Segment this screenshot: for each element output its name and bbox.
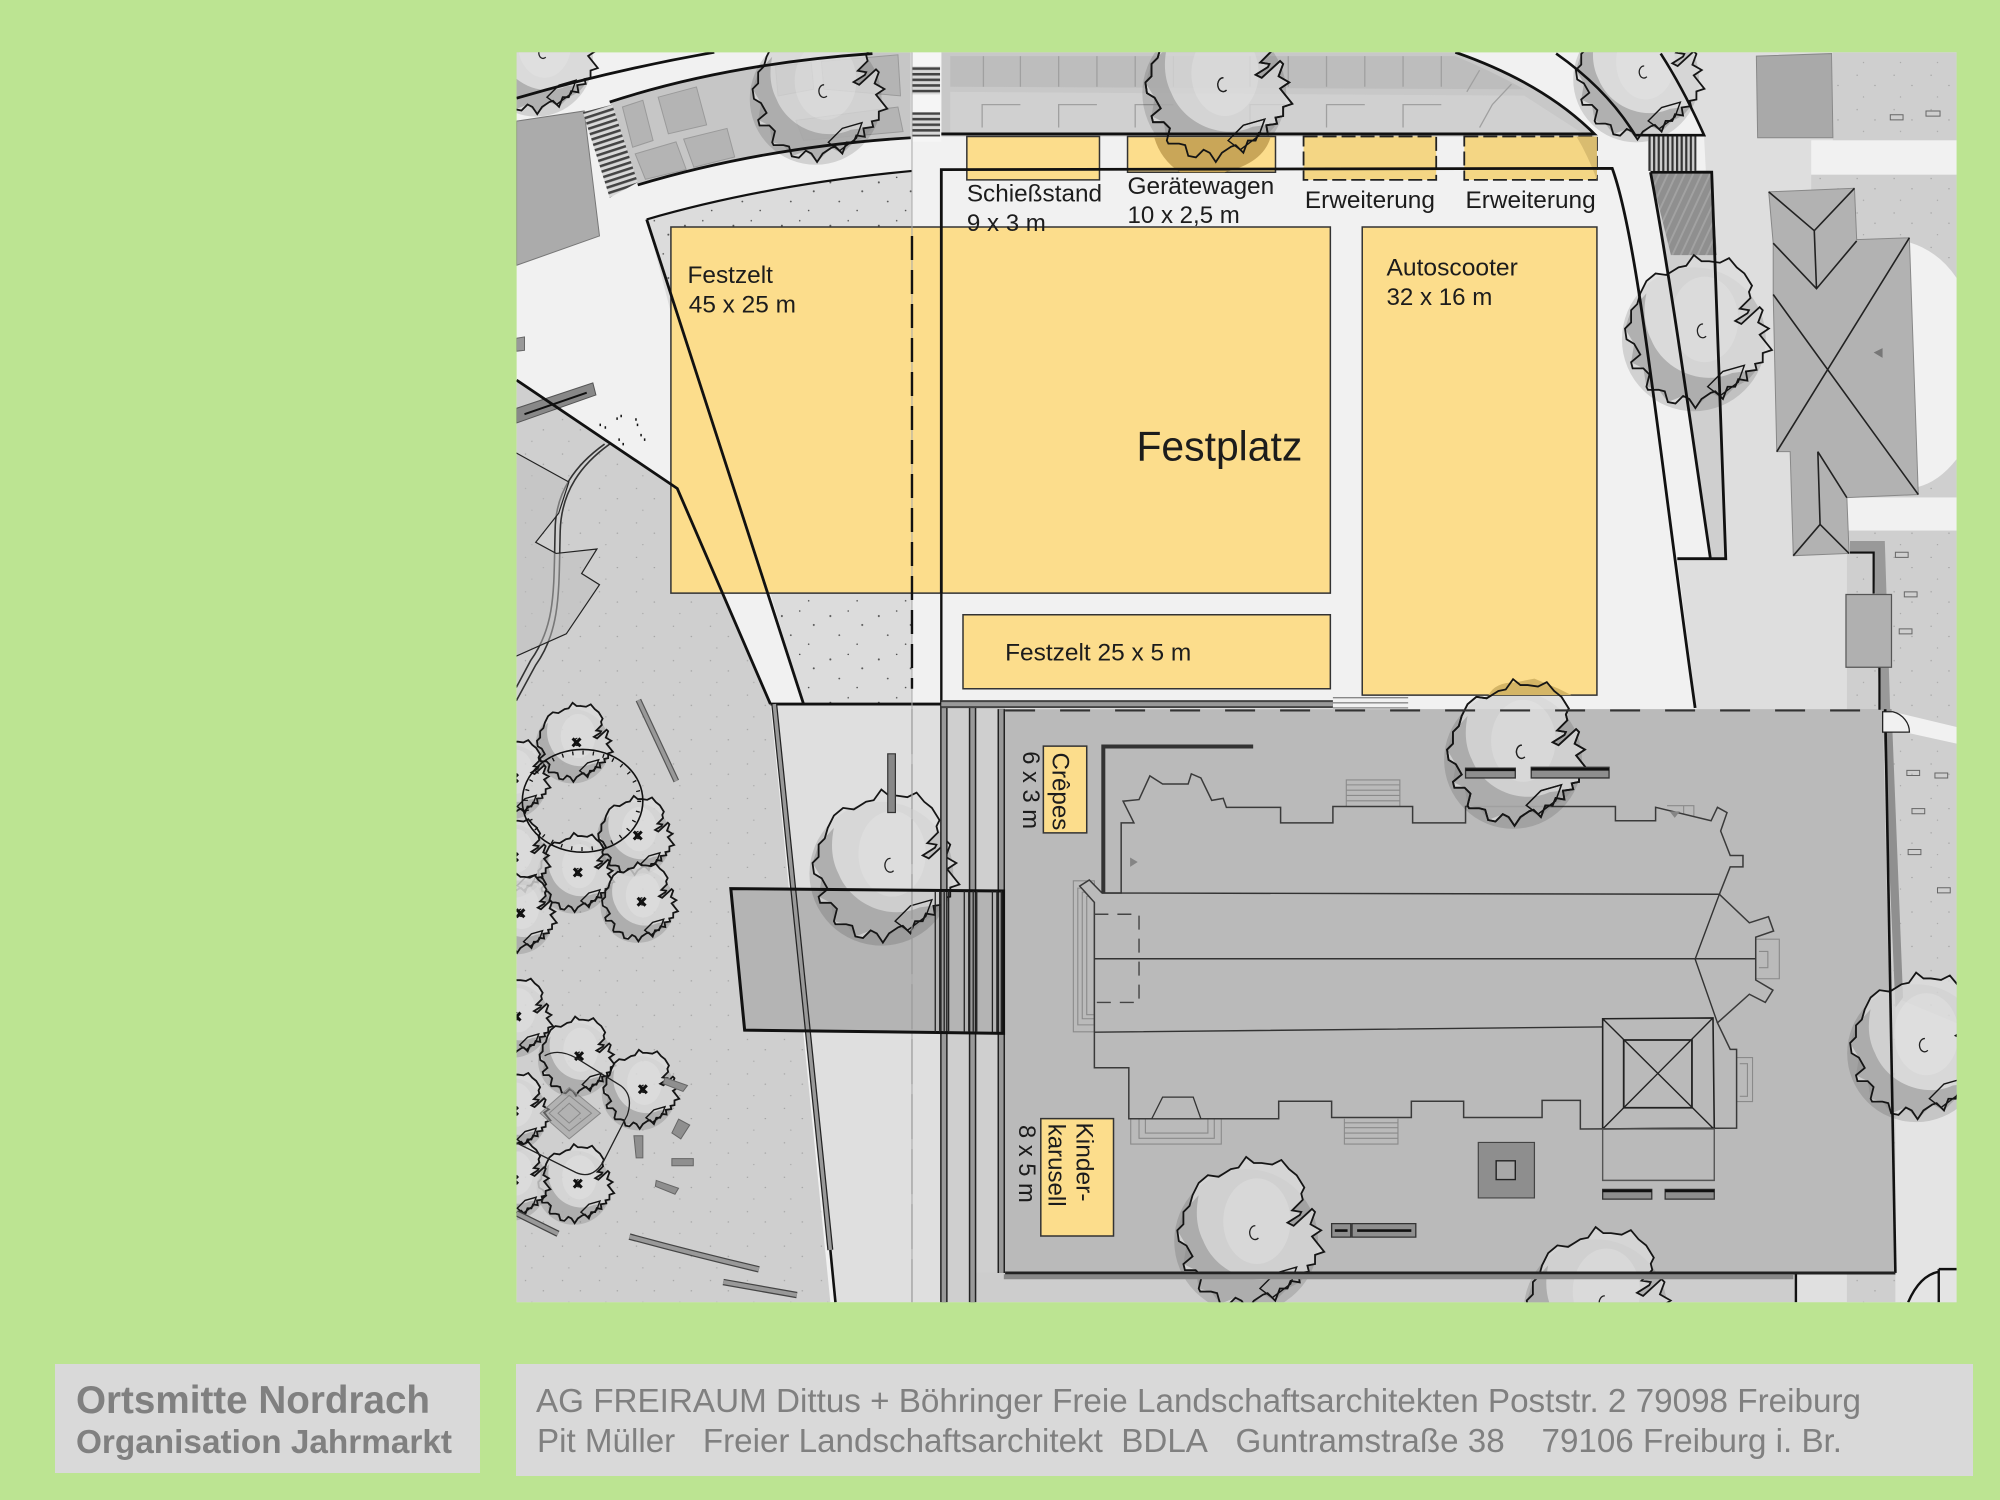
- label: Festplatz: Festplatz: [1136, 422, 1302, 469]
- label: Crêpes: 6 x 3 m: [1017, 751, 1044, 829]
- label: Festzelt 45 x 25 m: 45 x 25 m: [689, 291, 796, 318]
- church: [1073, 746, 1779, 1198]
- tree shadow on Autoscooter: [1489, 679, 1571, 695]
- church outline: [1080, 774, 1774, 1129]
- label: Schießstand: Schießstand: [967, 181, 1102, 208]
- credit line 1: AG FREIRAUM Dittus + Böhringer Freie Landschaftsarchitekten Poststr. 2 79098 Freiburg: [536, 1382, 1861, 1419]
- area: Kinderkarussell: [1041, 1119, 1114, 1236]
- church tower: [1603, 1018, 1714, 1180]
- house roofs: [1769, 188, 1918, 556]
- church portal canopy: [1152, 1097, 1201, 1119]
- wedge bed on the east side: [1650, 172, 1726, 559]
- parking band left: [610, 53, 911, 185]
- area: Schießstand: [967, 136, 1099, 180]
- gray roof top left: [517, 111, 599, 265]
- label: Gerätewagen: Gerätewagen: [1128, 173, 1274, 200]
- garden block top right: [1833, 52, 1957, 142]
- map base: plaza ground: [517, 52, 1957, 1302]
- area: Autoscooter: [1362, 227, 1597, 695]
- label: Erweiterung 1: Erweiterung: [1305, 187, 1435, 214]
- dashed choir outline: [1094, 914, 1139, 1002]
- trees: [473, 0, 1991, 1383]
- label: Crêpes: [1017, 751, 1073, 830]
- title panel: [55, 1364, 480, 1473]
- area: Gerätewagen: [1128, 136, 1276, 172]
- fountain square: [1478, 1142, 1534, 1198]
- forecourt top edge: [941, 698, 1895, 1277]
- ground below the church: [976, 1273, 1796, 1302]
- tree outline over Gerätewagen: [1145, 9, 1292, 162]
- site plan map: [516, 52, 1957, 1302]
- cross band over the road: [731, 889, 1004, 1033]
- label: Gerätewagen: 10 x 2,5 m: [1128, 202, 1240, 229]
- label: Crêpes: Crêpes: [1046, 753, 1073, 830]
- area: Festzelt 25 x 5 m: [963, 615, 1330, 689]
- festival areas: [671, 136, 1597, 1236]
- church forecourt: [1004, 709, 1895, 1273]
- benches: [1332, 767, 1714, 1237]
- subtitle: Organisation Jahrmarkt: [76, 1424, 452, 1461]
- door arc: [1883, 712, 1909, 732]
- label: Kinderkarussell: karusell: [1042, 1124, 1069, 1207]
- white path top right: [1811, 140, 1957, 175]
- light ground east of the plaza: [1661, 52, 1957, 709]
- label: Autoscooter: Autoscooter: [1386, 255, 1518, 282]
- label: Schießstand: 9 x 3 m: [967, 210, 1046, 237]
- plaza and road lines: [517, 52, 1895, 1302]
- label: Festzelt 45 x 25 m: [687, 262, 796, 318]
- side strip next to the church: [948, 708, 1005, 1302]
- label: Kinderkarussell: [1013, 1122, 1098, 1207]
- area: Festzelt 45 x 25 m and Festplatz: [671, 227, 1330, 593]
- label: Gerätewagen: [1128, 173, 1274, 229]
- steps in the walkway top: [912, 52, 941, 142]
- credits panel: [516, 1364, 1973, 1476]
- garden wall and shed: [1846, 541, 1892, 710]
- label: Kinderkarussell: Kinder-: [1071, 1122, 1098, 1202]
- church stair landings: [1073, 780, 1779, 1144]
- label: Autoscooter: [1386, 255, 1518, 311]
- gravel beds: [647, 171, 912, 704]
- square roof top right: [1756, 54, 1833, 138]
- title: Ortsmitte Nordrach: [76, 1379, 430, 1422]
- area: Erweiterung 2: [1464, 136, 1597, 180]
- parking band right: [941, 52, 1594, 136]
- credit line 2: Pit Müller Freier Landschaftsarchitekt BDLA Guntramstraße 38 79106 Freiburg i. Br.: [537, 1422, 1842, 1459]
- area: Crêpes: [1043, 746, 1087, 833]
- tree shadow on Gerätewagen: [1154, 138, 1270, 172]
- label: Erweiterung 2: Erweiterung: [1466, 187, 1596, 214]
- L-shaped wall: [1103, 746, 1253, 893]
- white forecourt behind house: [1909, 242, 1957, 487]
- road bars beside church: [774, 704, 1001, 1302]
- park furniture and plaza outline: [517, 700, 797, 1295]
- label: Kinderkarussell: 8 x 5 m: [1013, 1125, 1040, 1203]
- cross band outline and steps: [731, 889, 1004, 1033]
- shadow over Erweiterung: [1577, 136, 1597, 180]
- church roof lines: [1094, 893, 1756, 1032]
- corner marks bottom right: [1908, 1269, 1957, 1302]
- tree outline over Autoscooter: [1447, 679, 1588, 826]
- white path by the church corner: [1898, 713, 1956, 744]
- center walkway survey line: [911, 52, 913, 1302]
- label: Festzelt 45 x 25 m: Festzelt: [687, 262, 773, 289]
- white path beside house: [1847, 497, 1957, 531]
- label: Autoscooter: 32 x 16 m: [1386, 284, 1492, 311]
- label: Festzelt 25 x 5 m: Festzelt 25 x 5 m: [1005, 640, 1191, 667]
- park area on the left: [517, 380, 830, 1302]
- ground bottom right: [1796, 1274, 1896, 1302]
- gray wall strip along the church east edge: [1883, 709, 1903, 1008]
- garden block lower right: [1847, 531, 1957, 1302]
- garden block behind house: [1811, 175, 1957, 503]
- stair block near east entrance: [1648, 136, 1696, 171]
- park features upper left: [516, 337, 645, 701]
- central road: [773, 704, 941, 1302]
- stairs top left: [583, 105, 638, 198]
- small garden markers right side: [1890, 111, 1950, 893]
- label: Schießstand: [967, 181, 1102, 237]
- bottom right corner ground: [1895, 997, 1957, 1302]
- area: Erweiterung 1: [1304, 136, 1436, 180]
- post in front of tree: [888, 754, 895, 812]
- markers on the church: [1130, 811, 1680, 867]
